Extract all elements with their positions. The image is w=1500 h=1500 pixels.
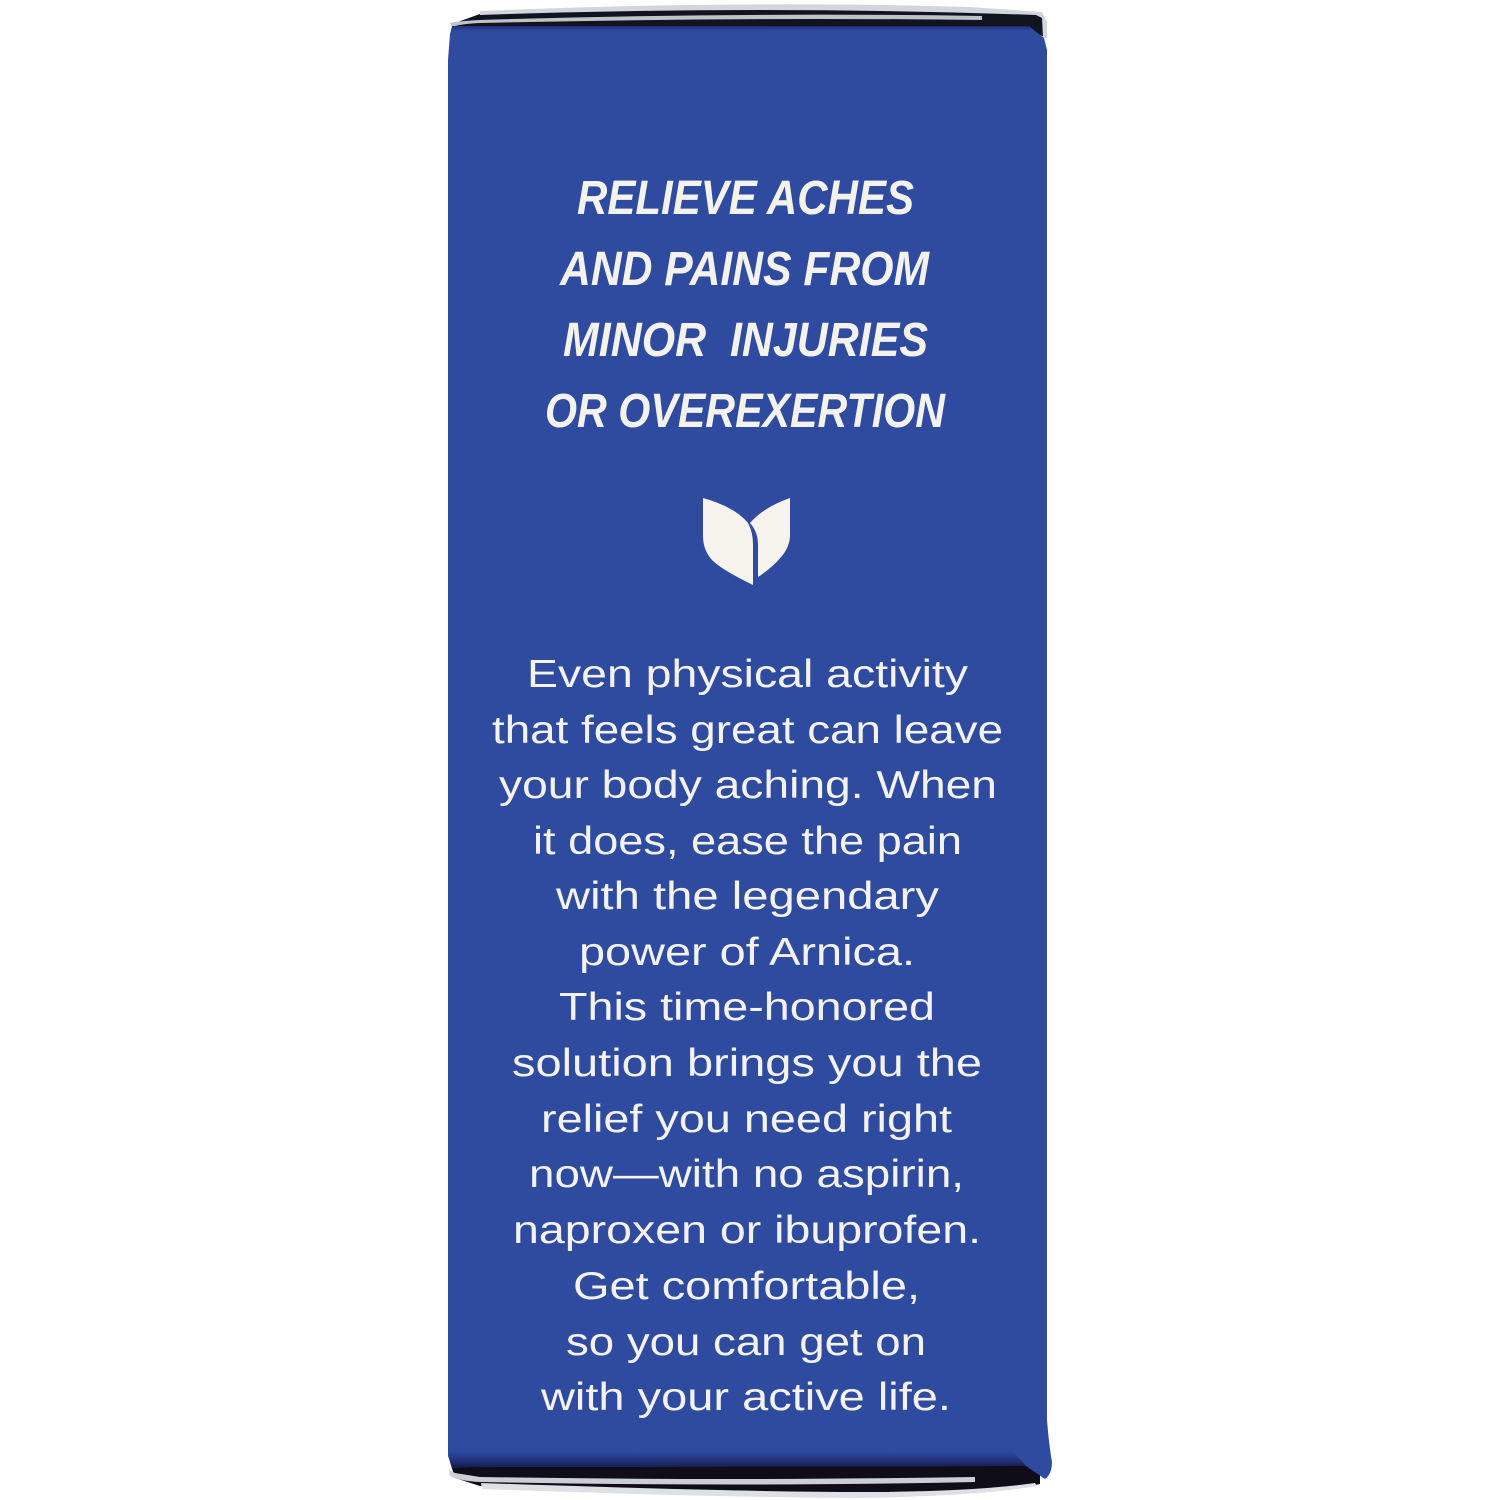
body text: your body aching. When — [499, 764, 997, 807]
top box flaps — [450, 4, 1047, 38]
heading: RELIEVE ACHES — [577, 172, 914, 225]
body text: Get comfortable, — [573, 1265, 920, 1308]
body text: This time-honored — [559, 986, 935, 1029]
body text: that feels great can leave — [492, 709, 1003, 752]
icon: leaf — [703, 498, 790, 585]
body text: solution brings you the — [512, 1042, 982, 1085]
body text: relief you need right — [541, 1098, 952, 1141]
body text: Even physical activity — [527, 653, 969, 696]
body text: so you can get on — [566, 1321, 926, 1364]
heading: OR OVEREXERTION — [545, 385, 946, 438]
body text — [492, 653, 1003, 1419]
heading — [545, 172, 946, 438]
bottom box flaps — [449, 1462, 1040, 1498]
body text: power of Arnica. — [579, 931, 915, 974]
heading: AND PAINS FROM — [559, 243, 930, 296]
blue box front panel — [448, 26, 1052, 1479]
body text: it does, ease the pain — [533, 820, 962, 863]
body text: with the legendary — [555, 875, 940, 918]
body text: naproxen or ibuprofen. — [513, 1209, 981, 1252]
body text: with your active life. — [540, 1376, 951, 1419]
body text: now—with no aspirin, — [529, 1153, 964, 1196]
heading: MINOR INJURIES — [563, 314, 928, 367]
